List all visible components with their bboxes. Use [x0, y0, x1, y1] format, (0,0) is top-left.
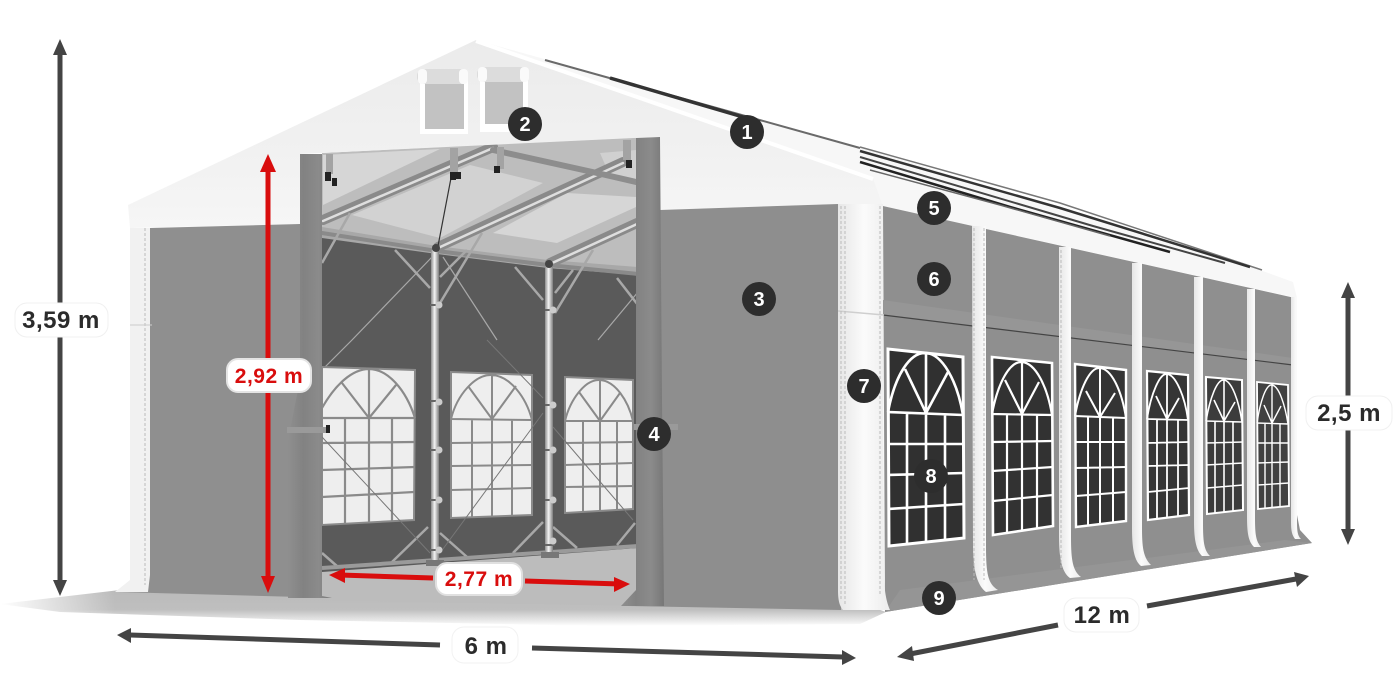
dimension: height 3,59 m: 3,59 m: [22, 307, 100, 334]
dimension: door width 2,77 m: [329, 563, 630, 595]
side wall: [883, 206, 1312, 612]
side window 3: [1075, 364, 1126, 527]
corner pillar: [838, 204, 890, 610]
side window 6: [1257, 382, 1289, 509]
left door curtain: [287, 154, 332, 598]
dimension: door height 2,92 m: [227, 154, 311, 593]
attic vents: [417, 67, 529, 134]
dimension: door width 2,77 m: 2,77 m: [445, 568, 513, 591]
pole left: [426, 244, 444, 566]
dimension: width 6 m: 6 m: [465, 633, 507, 660]
roof side with dark stripes: [476, 40, 1297, 298]
badge 6: 6: [928, 269, 940, 291]
dimension: length 12 m: 12 m: [1074, 602, 1130, 629]
badge 6: [917, 262, 951, 296]
badge 3: [742, 282, 776, 316]
badge 1: 1: [741, 122, 753, 144]
badge 8: 8: [925, 466, 937, 488]
side window 2: [992, 357, 1053, 535]
ground shadow: [0, 585, 886, 626]
dimension: side height 2,5 m: [1306, 282, 1392, 545]
side pillars: [972, 226, 1301, 592]
badge 8: [914, 459, 948, 493]
interior windows: [322, 340, 633, 553]
straps: [326, 140, 631, 174]
badge 1: [730, 115, 764, 149]
interior window 2: [451, 372, 532, 518]
back wall: [322, 232, 638, 572]
right door curtain: [621, 137, 678, 606]
badge 5: [917, 191, 951, 225]
ceiling: [322, 137, 638, 272]
front wall left: [115, 224, 300, 597]
front wall right: [628, 204, 841, 610]
badge 3: 3: [753, 289, 765, 311]
rafters: [322, 147, 638, 274]
side window 1: [888, 349, 964, 546]
gable front: [128, 40, 883, 228]
side windows: [888, 349, 1289, 546]
dimension: length 12 m: [897, 572, 1309, 661]
side window 5: [1206, 377, 1243, 514]
side window 4: [1147, 371, 1189, 520]
interior window 1: [322, 367, 415, 525]
badge 4: [637, 417, 671, 451]
dimension: door height 2,92 m: 2,92 m: [235, 365, 303, 388]
pole right: [541, 260, 559, 558]
badge 4: 4: [648, 424, 660, 446]
dimension: width 6 m: [117, 627, 856, 665]
dimension: height 3,59 m: [15, 39, 108, 596]
badge 9: [922, 581, 956, 615]
dimension: side height 2,5 m: 2,5 m: [1317, 400, 1381, 427]
badge 7: 7: [858, 376, 870, 398]
badge 9: 9: [933, 588, 945, 610]
interior window 3: [565, 377, 633, 513]
badge 7: [847, 369, 881, 403]
braces and wires: [322, 213, 638, 568]
floor: [322, 546, 640, 606]
badge 2: 2: [519, 114, 531, 136]
badge 5: 5: [928, 198, 940, 220]
interior of the tent: [322, 137, 640, 606]
badge 2: [508, 107, 542, 141]
